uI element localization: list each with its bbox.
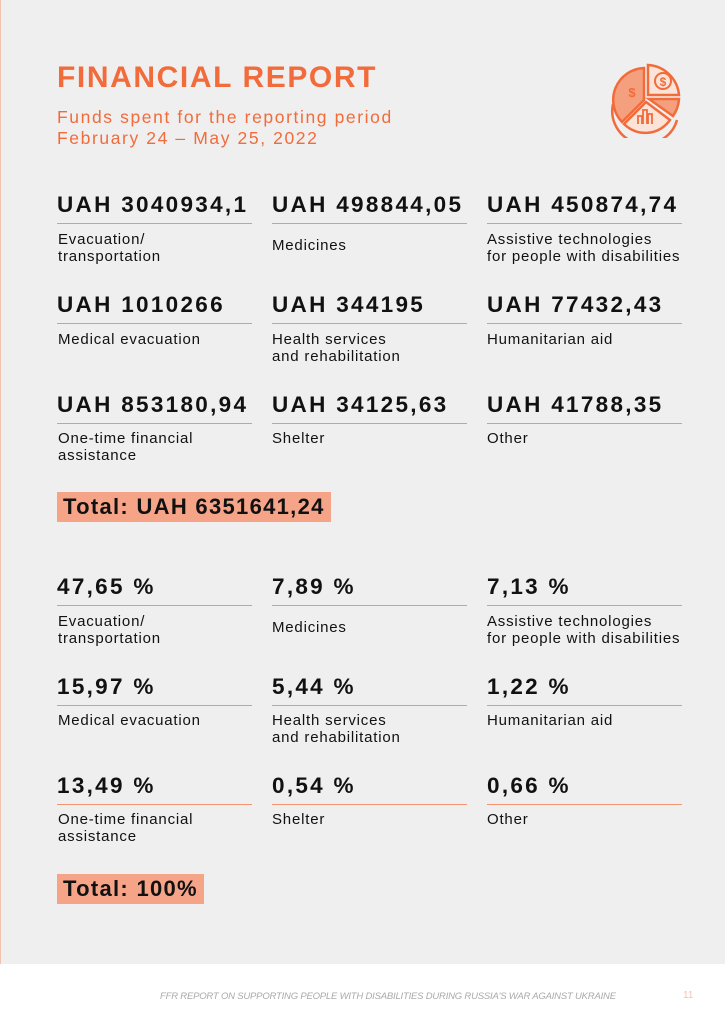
grid: percentages: 5,44 % [272, 674, 356, 699]
grid: amounts: for people with disabilities [487, 248, 680, 265]
total amount: Total: UAH 6351641,24 [63, 494, 325, 519]
grid: percentages: Assistive technologies [487, 613, 652, 630]
grid: percentages: assistance [58, 828, 137, 845]
subtitle: February 24 – May 25, 2022 [57, 128, 318, 148]
grid: amounts: assistance [58, 447, 137, 464]
grid: amounts: Other [487, 430, 529, 447]
icon: pie chart with dollars: $ [628, 85, 636, 100]
page number: 11 [683, 990, 693, 1001]
grid: percentages: 47,65 % [57, 574, 156, 599]
grid: percentages: 7,89 % [272, 574, 356, 599]
grid: amounts: Humanitarian aid [487, 331, 613, 348]
grid: percentages: Other [487, 811, 529, 828]
grid: amounts: UAH 498844,05 [272, 192, 463, 217]
grid: percentages: One-time financial [58, 811, 193, 828]
grid: amounts: One-time financial [58, 430, 193, 447]
grid: percentages: Shelter [272, 811, 325, 828]
grid: amounts: Medicines [272, 237, 347, 254]
grid: percentages: and rehabilitation [272, 729, 401, 746]
icon: pie chart with dollars: $ [660, 75, 667, 89]
title: FINANCIAL REPORT [57, 61, 377, 94]
grid: amounts: Medical evacuation [58, 331, 201, 348]
grid: amounts: Assistive technologies [487, 231, 652, 248]
icon: pie chart with dollars [610, 64, 680, 138]
grid: percentages: 0,66 % [487, 773, 571, 798]
grid: percentages: 15,97 % [57, 674, 156, 699]
grid: percentages: Medical evacuation [58, 712, 201, 729]
grid: percentages: 13,49 % [57, 773, 156, 798]
grid: amounts: UAH 41788,35 [487, 392, 663, 417]
grid: percentages: 7,13 % [487, 574, 571, 599]
grid: amounts: Shelter [272, 430, 325, 447]
grid: percentages [57, 574, 682, 845]
grid: amounts: UAH 77432,43 [487, 292, 663, 317]
total percent: Total: 100% [63, 876, 198, 901]
grid: percentages: Evacuation/ [58, 613, 145, 630]
grid: percentages: Humanitarian aid [487, 712, 613, 729]
grid: amounts: and rehabilitation [272, 348, 401, 365]
grid: amounts: UAH 3040934,1 [57, 192, 248, 217]
grid: percentages: Medicines [272, 619, 347, 636]
grid: percentages: transportation [58, 630, 161, 647]
grid: amounts: UAH 853180,94 [57, 392, 248, 417]
grid: percentages: Health services [272, 712, 387, 729]
grid: amounts [57, 192, 682, 464]
grid: percentages: for people with disabilities [487, 630, 680, 647]
grid: amounts: UAH 1010266 [57, 292, 225, 317]
subtitle: Funds spent for the reporting period [57, 107, 393, 127]
grid: amounts: UAH 450874,74 [487, 192, 678, 217]
grid: amounts: UAH 344195 [272, 292, 425, 317]
grid: amounts: transportation [58, 248, 161, 265]
grid: percentages: 1,22 % [487, 674, 571, 699]
grid: amounts: Health services [272, 331, 387, 348]
grid: amounts: UAH 34125,63 [272, 392, 448, 417]
grid: amounts: Evacuation/ [58, 231, 145, 248]
footer text: FFR REPORT ON SUPPORTING PEOPLE WITH DISABILITIES DURING RUSSIA'S WAR AGAINST UKRAINE [160, 991, 616, 1002]
subtitle [57, 107, 393, 148]
grid: percentages: 0,54 % [272, 773, 356, 798]
